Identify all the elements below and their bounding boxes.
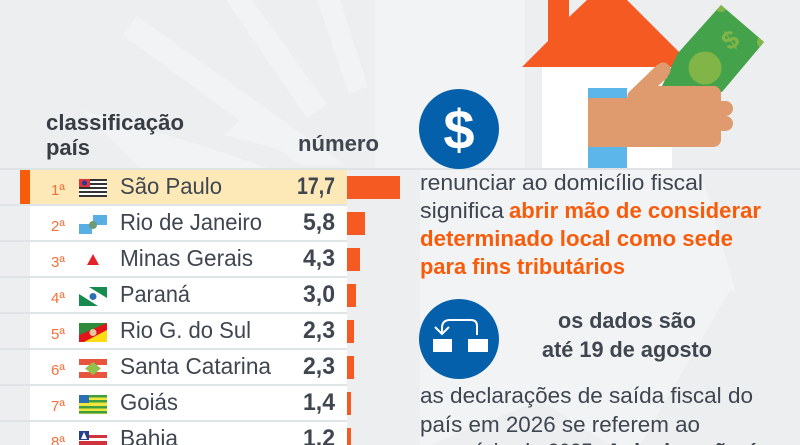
text: definition: abrir mão de considerar <box>509 198 761 223</box>
highlight marker <box>20 170 30 204</box>
text: definition: renunciar ao domicílio fiscal <box>420 170 703 195</box>
house roof and chimney <box>522 0 694 67</box>
banknote: $ <box>716 23 745 56</box>
row: Goiás: Goiás <box>120 389 178 415</box>
icon: dollar <box>419 89 499 169</box>
row: Santa Catarina: 6ª <box>51 362 65 379</box>
row: São Paulo: 17,7 <box>297 173 335 200</box>
row: Bahia <box>51 425 335 445</box>
row: Goiás <box>51 389 336 416</box>
row: Minas Gerais: Minas Gerais <box>120 245 253 271</box>
row: Santa Catarina <box>51 353 335 380</box>
banknote <box>662 5 764 92</box>
heading: data date: os dados são <box>558 308 696 333</box>
row: Minas Gerais: 4,3 <box>303 245 335 272</box>
row: Rio G. do Sul: 5ª <box>51 326 65 343</box>
row: Goiás: 7ª <box>51 398 65 415</box>
row: Rio de Janeiro: 5,8 <box>303 209 335 236</box>
icon: transfer arrow <box>419 299 499 379</box>
table header: classificação país: classificação <box>46 110 184 135</box>
row: Rio de Janeiro: Rio de Janeiro <box>120 209 262 235</box>
row: Rio G. do Sul: 2,3 <box>303 317 335 344</box>
table top rule <box>0 168 800 170</box>
table header: número: número <box>298 131 379 156</box>
house body <box>542 67 672 168</box>
bar chart <box>347 176 400 445</box>
row: Paraná: 4ª <box>51 290 65 307</box>
row: Paraná <box>51 281 335 308</box>
row: Rio G. do Sul: Rio G. do Sul <box>120 317 251 343</box>
row: Rio G. do Sul <box>51 317 335 344</box>
hand <box>588 62 733 147</box>
row: Rio de Janeiro <box>51 209 335 236</box>
row: São Paulo: São Paulo <box>120 173 222 199</box>
row: Minas Gerais <box>51 245 335 272</box>
shirt sleeve <box>588 88 627 168</box>
row: Goiás: 1,4 <box>303 389 336 416</box>
row: Santa Catarina: Santa Catarina <box>120 353 271 379</box>
row: Santa Catarina: 2,3 <box>303 353 335 380</box>
icon: dollar: $ <box>443 98 475 161</box>
text: data note <box>420 383 758 445</box>
row: São Paulo: 1ª <box>51 182 65 199</box>
row: São Paulo <box>51 173 335 200</box>
illustration: house with hand holding money <box>522 0 771 168</box>
text: data note: país em 2026 se referem ao <box>420 412 700 437</box>
text: definition: para fins tributários <box>420 254 625 279</box>
row: Paraná: 3,0 <box>303 281 335 308</box>
heading: data date: até 19 de agosto <box>542 337 712 362</box>
text: data note: as declarações de saída fiscal do <box>420 383 753 408</box>
row: Rio de Janeiro: 2ª <box>51 218 65 235</box>
text: definition: significa <box>420 198 504 223</box>
table header: classificação país: país <box>46 135 90 160</box>
text: definition: determinado local como sede <box>420 226 733 251</box>
row: Paraná: Paraná <box>120 281 190 307</box>
table header: classificação país <box>46 110 184 160</box>
text: definition <box>420 170 761 279</box>
ranking table rows <box>0 170 347 445</box>
row: Minas Gerais: 3ª <box>51 254 65 271</box>
heading: data date <box>542 308 712 362</box>
